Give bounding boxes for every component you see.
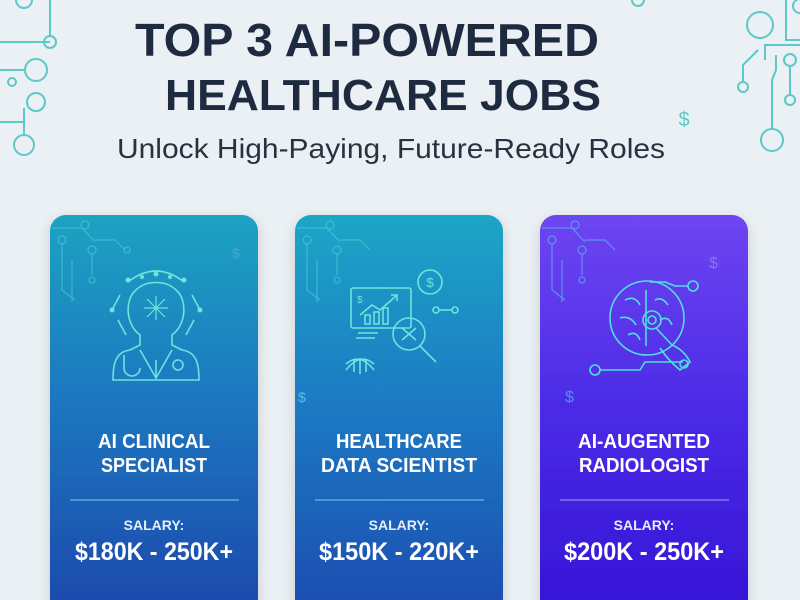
subtitle: Unlock High-Paying, Future-Ready Roles [117,133,665,164]
panel: AI-augmented radiologist: $200K - 250K+ [564,538,724,566]
panel: healthcare data scientist: $ [298,389,306,405]
panel: AI-augmented radiologist: RADIOLOGIST [579,455,709,477]
panel: AI clinical specialist [50,215,258,600]
job title: AI-AUGENTED [578,431,710,453]
job title: HEALTHCARE [336,431,462,453]
panel: AI-augmented radiologist: $ [565,389,574,406]
icon: AI doctor head [110,271,202,380]
job title: AI CLINICAL [98,431,210,453]
icon: data chart with magnifier and DNA: $ [426,275,434,290]
icon: brain with touch [590,281,698,375]
panel: AI clinical specialist: $ [232,245,240,261]
salary: SALARY: [614,517,674,533]
panel: healthcare data scientist [295,215,503,600]
salary: SALARY: [124,517,184,533]
title: TOP 3 AI-POWERED [135,14,599,66]
salary: SALARY: [369,517,429,533]
panel: AI clinical specialist: $180K - 250K+ [75,538,233,566]
panel: healthcare data scientist: DATA SCIENTIST [321,455,477,477]
icon: dollar sign: $ [678,109,690,131]
circuit decoration left [0,0,56,155]
title [135,14,601,120]
circuit decoration right [632,0,800,151]
icon: data chart with magnifier and DNA [346,270,458,374]
card circuit decor [52,221,130,302]
panel: healthcare data scientist: $150K - 220K+ [319,538,479,566]
panel: AI-augmented radiologist: $ [709,255,718,272]
panel: AI-augmented radiologist [540,215,748,600]
icon: data chart with magnifier and DNA: $ [357,295,363,306]
title: HEALTHCARE JOBS [165,71,601,120]
panel: AI clinical specialist: SPECIALIST [101,455,207,477]
